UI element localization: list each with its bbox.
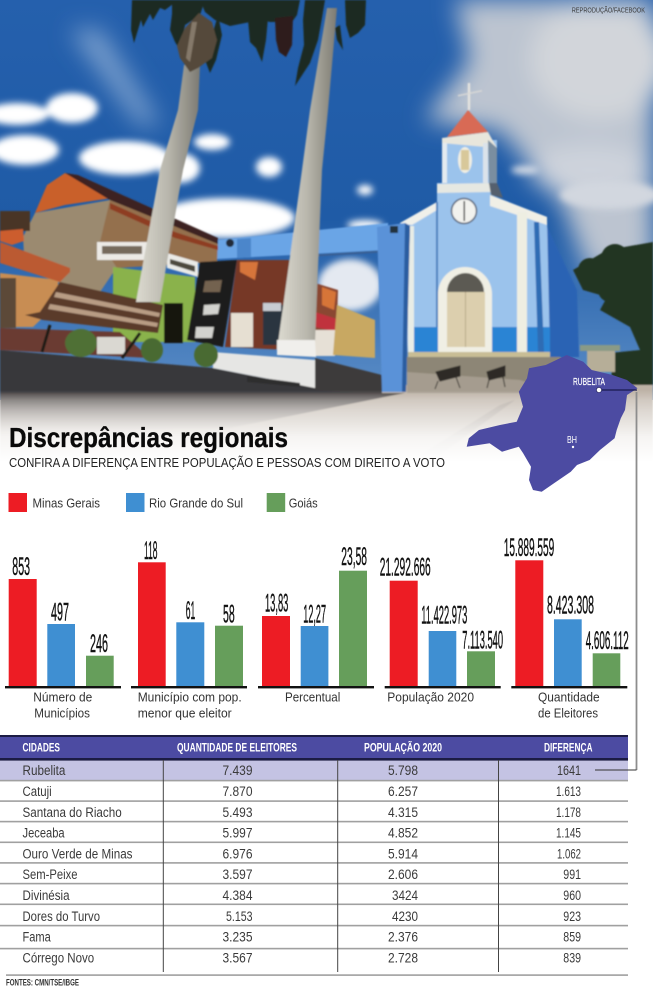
- bar chart: município com população menor que eleitor: 61: [186, 597, 195, 625]
- bar chart: quantidade de eleitores: de Eleitores: [538, 706, 598, 721]
- legend: Minas Gerais: [32, 495, 100, 510]
- table: Sem-Peixe: [22, 867, 78, 882]
- table: Catuji: [22, 784, 52, 799]
- palm crown: [177, 13, 217, 72]
- table: 5.914: [388, 846, 418, 862]
- bar chart: município com população menor que eleitor: 58: [223, 600, 235, 628]
- bar chart: percentual: 23,58: [341, 543, 367, 571]
- ground shadow: [0, 392, 404, 424]
- map of Minas Gerais: RUBELITA: [573, 377, 605, 388]
- bar chart: número de municípios: 853: [12, 553, 30, 581]
- palm trunks: [136, 65, 200, 302]
- bushes: [65, 329, 97, 357]
- palm fronds: [131, 0, 366, 86]
- table: Rubelita: [22, 763, 66, 778]
- table: Dores do Turvo: [22, 909, 100, 924]
- table: CIDADES: [22, 741, 60, 755]
- table: Córrego Novo: [22, 951, 94, 966]
- table: 4.852: [388, 826, 418, 840]
- table: 5.798: [388, 763, 418, 778]
- orange house: [0, 273, 58, 327]
- table: Santana do Riacho: [22, 805, 122, 820]
- dark wall: [0, 350, 382, 394]
- benches: [435, 366, 460, 389]
- table: 2.728: [388, 951, 418, 966]
- bar chart: município com população menor que eleitor: menor que eleitor: [138, 706, 232, 721]
- fade to white: [0, 390, 653, 462]
- title: Discrepâncias regionais: [9, 422, 288, 453]
- bar chart: município com população menor que eleitor: [131, 537, 247, 721]
- bench, ground strip: [0, 328, 150, 358]
- table: 5.997: [222, 826, 252, 840]
- table: 4.384: [222, 888, 253, 903]
- bar chart: município com população menor que eleitor: 118: [144, 537, 158, 565]
- bar chart: percentual: 12,27: [303, 600, 326, 628]
- table: Fama: [22, 930, 51, 945]
- infographic: 7.113.540: [462, 626, 503, 654]
- table: 5.153: [226, 909, 252, 924]
- table: 1641: [557, 763, 581, 778]
- plaza: [0, 384, 653, 446]
- table: Divinésia: [22, 888, 70, 903]
- bar chart: população 2020: População 2020: [387, 690, 474, 705]
- legend: Goiás: [289, 495, 318, 510]
- table: POPULAÇÃO 2020: [364, 740, 442, 755]
- table: 7.870: [222, 784, 252, 799]
- table: 1.062: [557, 846, 581, 862]
- table: 2.606: [388, 867, 418, 882]
- table: 4230: [392, 909, 418, 924]
- bar chart: número de municípios: [5, 553, 121, 721]
- gate beam: [217, 223, 388, 259]
- table: 960: [563, 888, 581, 903]
- table: DIFERENÇA: [544, 741, 593, 755]
- bar chart: população 2020: 21.292.666: [380, 554, 431, 582]
- legend: [8, 493, 318, 512]
- table: Jeceaba: [22, 826, 65, 840]
- table: 859: [563, 930, 581, 945]
- table: 6.976: [222, 846, 252, 862]
- middle buildings: [225, 260, 290, 350]
- subtitle: CONFIRA A DIFERENÇA ENTRE POPULAÇÃO E PESSOAS COM DIREITO A VOTO: [9, 455, 445, 470]
- legend: Rio Grande do Sul: [149, 495, 243, 510]
- bar chart: quantidade de eleitores: [504, 534, 629, 721]
- table: 3424: [392, 888, 418, 903]
- bar chart: número de municípios: 497: [51, 599, 69, 627]
- church side wall: [545, 222, 579, 358]
- bar chart: percentual: Percentual: [285, 690, 340, 705]
- map of Minas Gerais: [467, 355, 638, 492]
- bar chart: percentual: 13,83: [265, 590, 288, 618]
- bar chart: percentual: [258, 543, 374, 705]
- table: 923: [563, 909, 581, 924]
- bar chart: quantidade de eleitores: Quantidade: [538, 690, 600, 705]
- table: 3.235: [222, 930, 252, 945]
- table: 4.315: [388, 805, 418, 820]
- table: 2.376: [388, 930, 418, 945]
- bar chart: população 2020: [380, 554, 503, 705]
- table: [0, 735, 628, 976]
- left building: [23, 200, 117, 292]
- bar chart: quantidade de eleitores: 15.889.559: [504, 534, 554, 562]
- map of Minas Gerais: BH: [567, 435, 577, 446]
- table: 991: [563, 867, 581, 882]
- table: 839: [563, 951, 581, 966]
- bar chart: população 2020: 11.422.973: [421, 601, 467, 629]
- table: 1.613: [556, 784, 581, 799]
- table: 3.567: [222, 951, 252, 966]
- table: 7.439: [222, 763, 252, 778]
- steps and church yard: [406, 350, 552, 358]
- bar chart: número de municípios: Número de: [33, 690, 92, 705]
- photo: church square in Rubelita: [0, 0, 653, 480]
- right tree: [573, 242, 653, 392]
- table: Ouro Verde de Minas: [22, 846, 133, 862]
- table: 3.597: [222, 867, 252, 882]
- table: 1.178: [556, 805, 581, 820]
- source note: FONTES: CMN/TSE/IBGE: [6, 978, 79, 988]
- leader line from map to Rubelita row: [595, 392, 636, 770]
- table: 6.257: [388, 784, 418, 799]
- bar chart: município com população menor que eleitor: Município com pop.: [138, 690, 242, 705]
- church facade: [400, 140, 550, 353]
- bar chart: número de municípios: Municípios: [34, 706, 90, 721]
- gate post: [377, 222, 406, 393]
- table: 5.493: [222, 805, 252, 820]
- bar chart: número de municípios: 246: [90, 630, 108, 658]
- table: QUANTIDADE DE ELEITORES: [177, 741, 297, 755]
- table: 1.145: [556, 826, 581, 840]
